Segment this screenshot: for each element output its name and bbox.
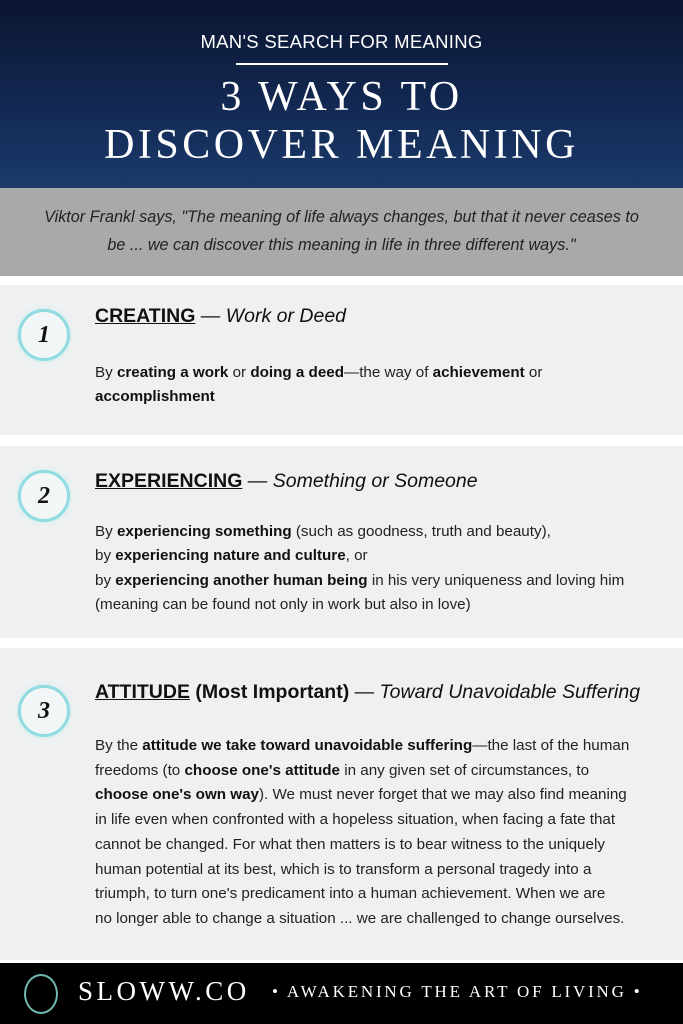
- quote band: be ... we can discover this meaning in life in three different ways.": [107, 236, 576, 254]
- brand: SLOWW.CO: [78, 976, 250, 1006]
- icon: number 1: [18, 309, 70, 361]
- body 1: [95, 364, 542, 405]
- panel: creating: [0, 285, 683, 435]
- body 2: By experiencing something (such as goodness, truth and beauty),: [95, 523, 551, 540]
- body 3: freedoms (to choose one's attitude in any given set of circumstances, to: [95, 762, 589, 779]
- icon: number 3: [18, 685, 70, 737]
- heading 1: CREATING — Work or Deed: [95, 305, 346, 327]
- icon: number 3: 3: [38, 698, 50, 724]
- icon: number 2: 2: [38, 483, 50, 509]
- body 3: [95, 737, 629, 927]
- panel: experiencing: [0, 446, 683, 638]
- body 2: by experiencing another human being in his very uniqueness and loving him: [95, 572, 624, 589]
- title: DISCOVER MEANING: [104, 122, 579, 168]
- icon: number 1: 1: [38, 322, 50, 348]
- body 1: By creating a work or doing a deed—the way of achievement or: [95, 364, 542, 381]
- body 2: by experiencing nature and culture, or: [95, 547, 368, 564]
- subtitle: MAN'S SEARCH FOR MEANING: [200, 31, 483, 52]
- title: 3 WAYS TO: [220, 74, 463, 120]
- body 3: By the attitude we take toward unavoidable suffering—the last of the human: [95, 737, 629, 754]
- header: [0, 0, 683, 188]
- icon: number 2: [18, 470, 70, 522]
- footer: [0, 963, 683, 1024]
- body 3: choose one's own way). We must never forget that we may also find meaning: [95, 786, 627, 803]
- body 3: human potential at its best, which is to transform a personal tragedy into a: [95, 861, 591, 878]
- quote band: [0, 188, 683, 276]
- body 3: triumph, to turn one's predicament into a human achievement. When we are: [95, 885, 605, 902]
- heading 2: EXPERIENCING — Something or Someone: [95, 470, 478, 492]
- body 3: in life even when confronted with a hopeless situation, when facing a fate that: [95, 811, 615, 828]
- quote band: Viktor Frankl says, "The meaning of life always changes, but that it never ceases to: [44, 208, 639, 226]
- body 3: cannot be changed. For what then matters is to bear witness to the uniquely: [95, 836, 605, 853]
- body 2: (meaning can be found not only in work but also in love): [95, 596, 471, 613]
- panel: attitude: [0, 648, 683, 960]
- body 2: [95, 523, 624, 613]
- heading 3: ATTITUDE (Most Important) — Toward Unavoidable Suffering: [95, 681, 640, 703]
- icon: logo ring: [24, 974, 58, 1014]
- tagline: • AWAKENING THE ART OF LIVING •: [272, 982, 643, 1001]
- body 1: accomplishment: [95, 388, 215, 405]
- body 3: no longer able to change a situation ... we are challenged to change ourselves.: [95, 910, 624, 927]
- title: [104, 74, 579, 168]
